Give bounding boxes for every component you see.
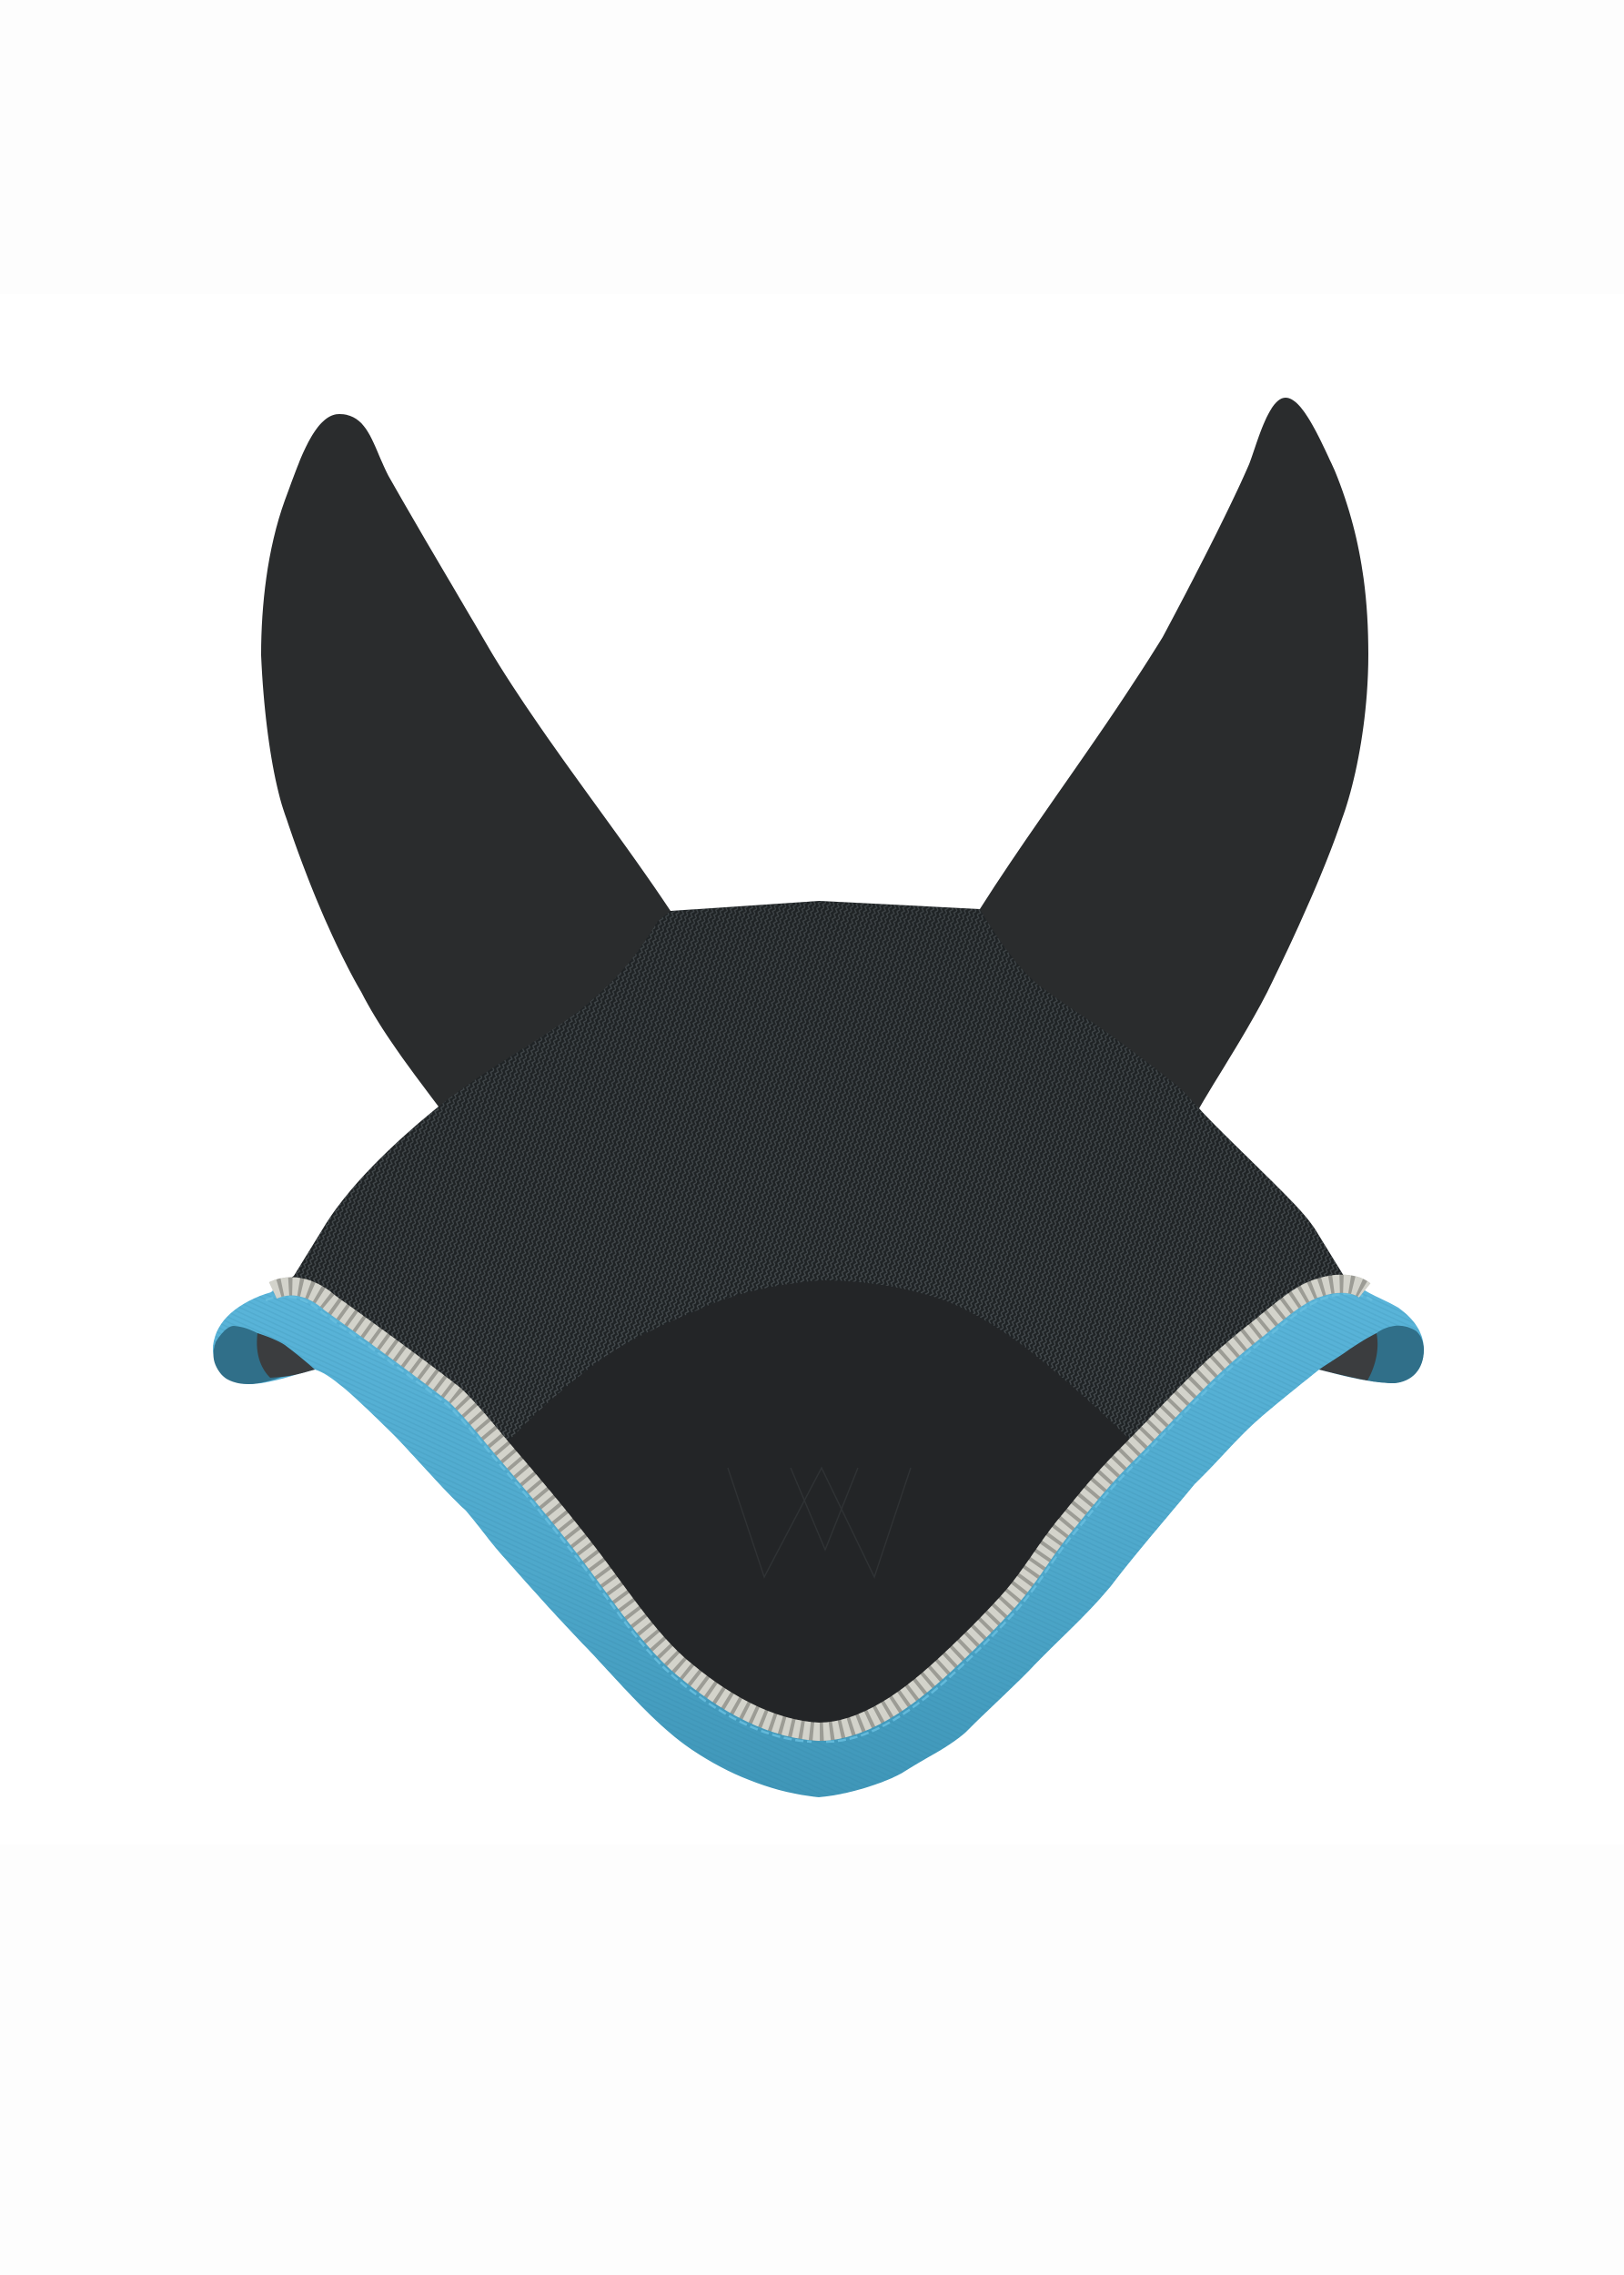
left flap underside (214, 1326, 315, 1384)
nose patch (503, 1280, 1137, 1738)
right ear (910, 398, 1368, 1108)
blue binding (213, 1284, 1424, 1797)
silver twisted cord (273, 1284, 1365, 1732)
binding stitching (266, 1294, 1372, 1742)
mesh crown (292, 901, 1343, 1441)
embossed logo (728, 1468, 911, 1577)
left ear (261, 414, 728, 1107)
right flap underside (1319, 1326, 1424, 1383)
